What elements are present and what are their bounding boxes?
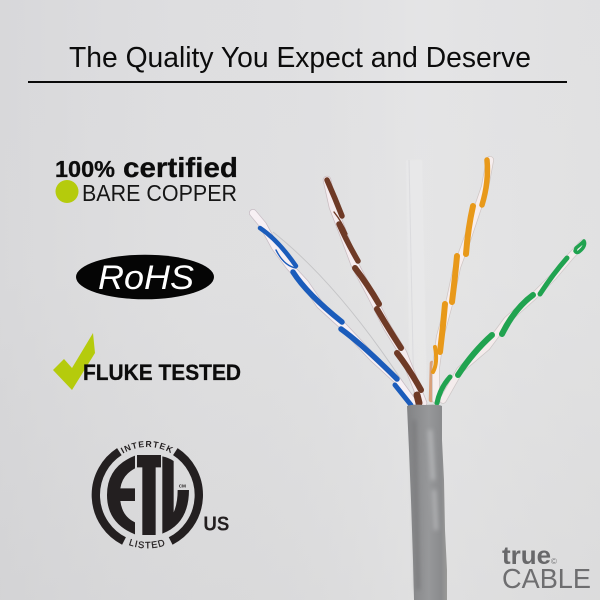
logo: ETL listed: US — [203, 513, 229, 536]
badge: Fluke tested — [53, 333, 241, 390]
logo: trueCABLE: true — [502, 542, 551, 570]
badge: 100% certified bare copper — [55, 152, 238, 206]
badge: RoHS — [76, 255, 214, 299]
logo: ETL listed: LISTED — [129, 538, 164, 548]
logo: ETL listed — [92, 441, 229, 548]
badge: 100% certified bare copper: BARE COPPER — [82, 180, 237, 206]
logo: ETL listed: INTERTEK — [120, 441, 174, 454]
transparent filler wire — [406, 160, 427, 404]
badge: 100% certified bare copper: 100% — [55, 156, 115, 182]
badge: 100% certified bare copper: certified — [123, 152, 238, 183]
badge: Fluke tested: FLUKE TESTED — [83, 360, 241, 385]
logo: trueCABLE: © — [551, 557, 557, 566]
wire pair: green — [437, 241, 584, 403]
cable ripcord thread — [273, 232, 408, 390]
logo: trueCABLE — [502, 542, 591, 594]
logo: ETL listed: CM — [179, 484, 186, 489]
badge: RoHS: RoHS — [98, 259, 194, 297]
wire pair: orange — [431, 160, 490, 400]
logo: trueCABLE: CABLE — [502, 563, 591, 594]
wire pair: brown — [327, 180, 423, 403]
cable jacket — [407, 405, 447, 600]
title: The Quality You Expect and Deserve — [69, 42, 531, 74]
wire pair: blue — [253, 213, 413, 405]
